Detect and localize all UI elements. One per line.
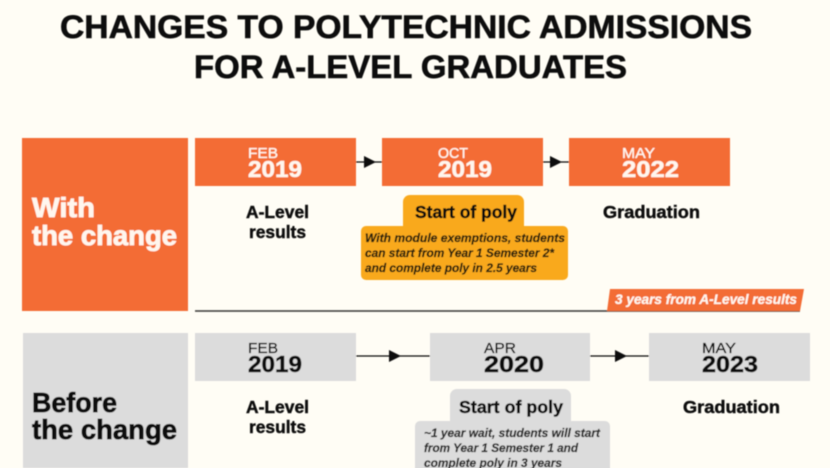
arrow <box>590 350 649 362</box>
text: A-Level results: A-Level <box>246 397 309 417</box>
date box: Oct 2019 <box>382 138 543 186</box>
callout: start of poly: and complete poly in 2.5 years <box>365 261 537 275</box>
row label: with the change: the change <box>32 220 177 251</box>
row label: before the change: Before <box>32 387 117 418</box>
row label: with the change: With <box>32 192 95 223</box>
date box: Feb 2019: FEB <box>248 340 278 357</box>
text: graduation: Graduation <box>603 202 700 222</box>
date box: Feb 2019 <box>195 138 356 186</box>
callout: start of poly: Start of poly <box>459 397 563 417</box>
text: A-Level results: A-Level <box>246 202 309 222</box>
date box: Apr 2020: APR <box>484 340 516 357</box>
date box: May 2023 <box>649 333 810 381</box>
arrow <box>356 156 382 168</box>
timeline rule <box>195 310 800 312</box>
text: A-Level results <box>246 397 309 437</box>
callout: start of poly: ~1 year wait, students will start <box>424 426 601 440</box>
date box: Feb 2019 <box>195 333 356 381</box>
title: CHANGES TO POLYTECHNIC ADMISSIONS <box>60 9 752 45</box>
callout: start of poly <box>415 389 610 468</box>
date box: May 2023: MAY <box>702 340 736 357</box>
date box: May 2022: MAY <box>622 145 655 162</box>
callout: start of poly: With module exemptions, students <box>365 231 565 245</box>
row label: with the change <box>22 138 188 311</box>
text: A-Level results <box>246 202 309 242</box>
date box: Apr 2020: 2020 <box>484 351 544 377</box>
date box: May 2023: 2023 <box>702 351 758 377</box>
date box: Feb 2019: 2019 <box>248 351 302 377</box>
callout: start of poly: Start of poly <box>415 202 517 222</box>
date box: Apr 2020 <box>430 333 590 381</box>
title: FOR A-LEVEL GRADUATES <box>194 49 627 85</box>
callout: start of poly: can start from Year 1 Semester 2* <box>365 246 555 260</box>
date box: Feb 2019: FEB <box>248 145 278 162</box>
panel: before the change <box>23 333 810 468</box>
title <box>60 9 752 85</box>
panel: with the change <box>22 138 804 311</box>
callout: start of poly: from Year 1 Semester 1 and <box>424 441 579 455</box>
tag: 3 years: 3 years from A-Level results <box>615 292 797 307</box>
text: A-Level results: results <box>249 222 306 242</box>
date box: Oct 2019: 2019 <box>438 156 492 182</box>
date box: May 2022: 2022 <box>622 156 679 182</box>
date box: May 2022 <box>569 138 730 186</box>
callout: start of poly <box>361 195 568 280</box>
date box: Feb 2019: 2019 <box>248 156 302 182</box>
row label: before the change <box>23 333 188 468</box>
date box: Oct 2019: OCT <box>438 145 468 162</box>
arrow <box>543 156 569 168</box>
text: A-Level results: results <box>249 417 306 437</box>
row label: before the change: the change <box>32 414 177 445</box>
tag: 3 years <box>607 289 804 311</box>
arrow <box>356 350 430 362</box>
text: graduation: Graduation <box>683 397 780 417</box>
